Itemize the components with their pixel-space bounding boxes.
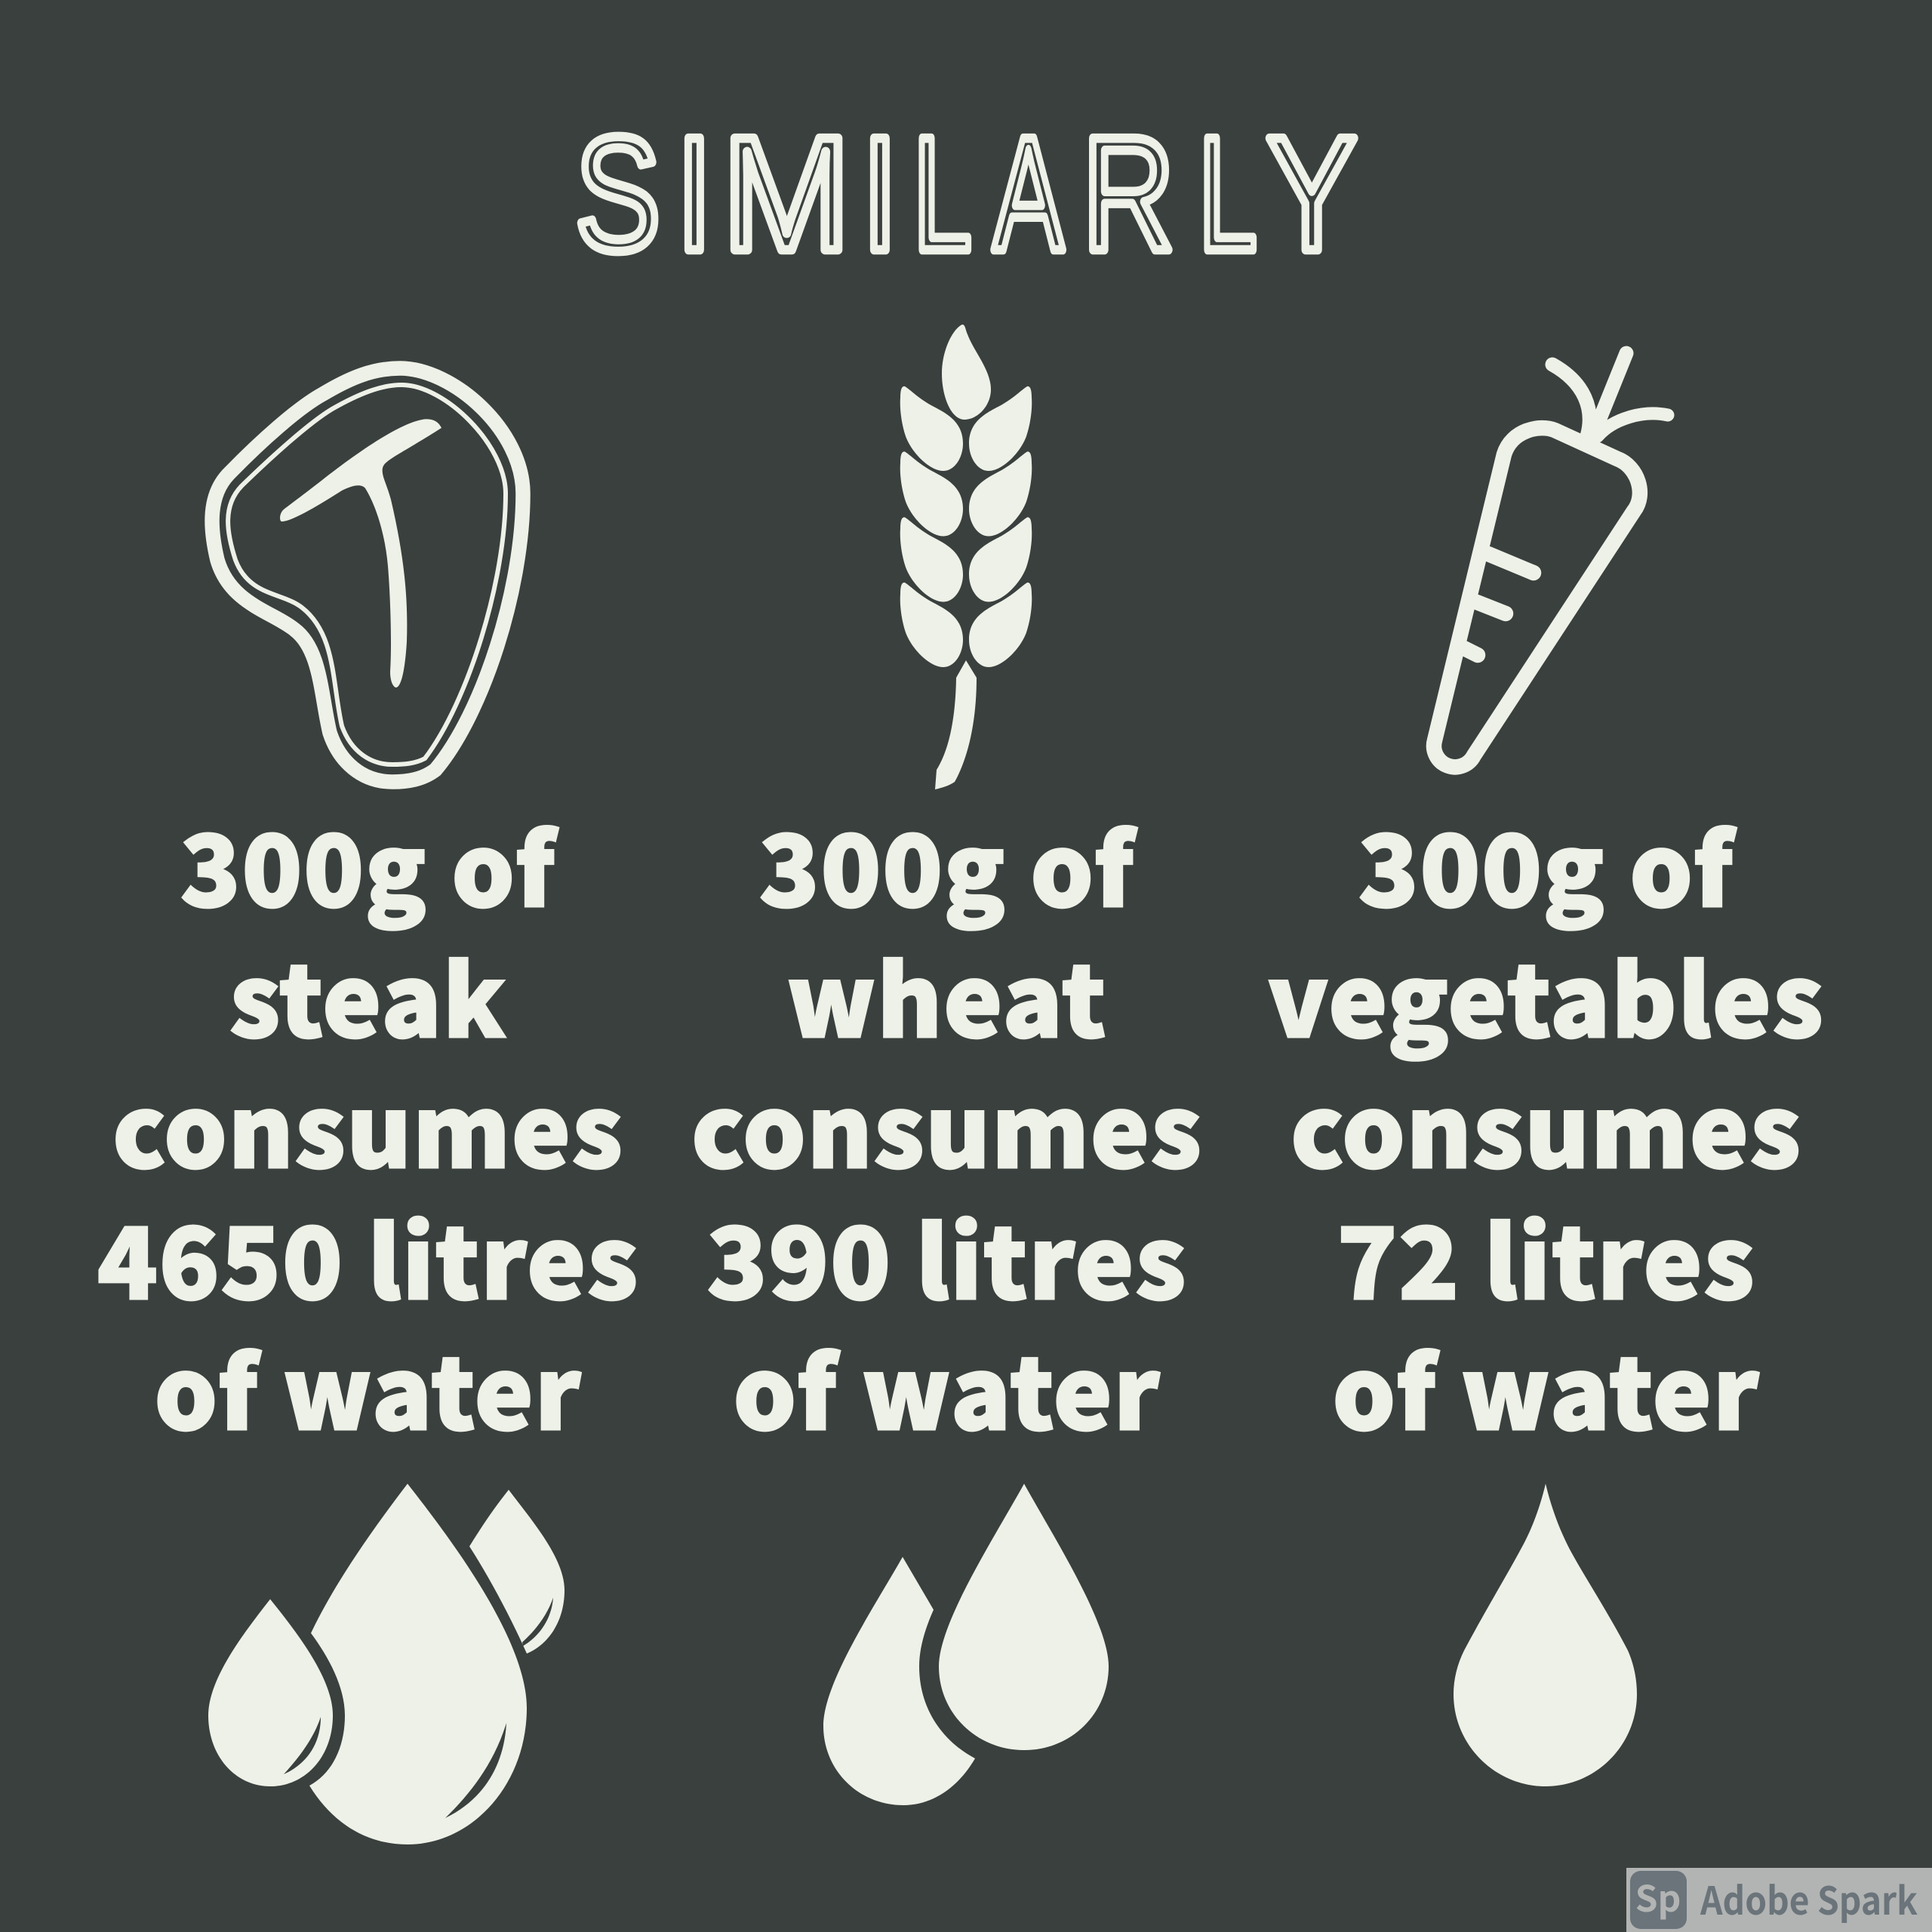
title: M bbox=[722, 103, 851, 285]
text: vegetables: 72 litres bbox=[1337, 1184, 1755, 1327]
text: wheat bbox=[691, 792, 1203, 1458]
text: steak: steak bbox=[229, 922, 507, 1066]
text: wheat: wheat bbox=[787, 922, 1107, 1066]
icon: three water drops bbox=[208, 1484, 565, 1844]
watermark: Adobe Spark bbox=[1626, 1868, 1932, 1932]
text: steak: of water bbox=[155, 1315, 582, 1458]
title: Y bbox=[1266, 103, 1357, 285]
title: R bbox=[1082, 104, 1175, 285]
text: vegetables: vegetables bbox=[1268, 922, 1825, 1066]
title: L bbox=[1198, 104, 1257, 285]
text: steak bbox=[97, 792, 639, 1458]
title: A bbox=[993, 104, 1063, 285]
text: vegetables: 300g of bbox=[1358, 792, 1737, 935]
watermark: Adobe Spark: Sp bbox=[1635, 1869, 1681, 1922]
text: vegetables: of water bbox=[1333, 1315, 1760, 1458]
title: L bbox=[913, 104, 972, 285]
icon: wheat bbox=[900, 325, 1032, 789]
title: S bbox=[575, 104, 660, 285]
text: steak: 4650 litres bbox=[97, 1184, 639, 1327]
icon: two water drops bbox=[823, 1484, 1109, 1805]
icon: steak bbox=[212, 368, 523, 782]
text: vegetables bbox=[1268, 792, 1825, 1458]
text: steak: consumes bbox=[112, 1053, 624, 1196]
text: wheat: consumes bbox=[691, 1053, 1203, 1196]
text: steak: 300g of bbox=[180, 792, 558, 935]
title bbox=[575, 103, 1357, 285]
icon: one water drop bbox=[1454, 1484, 1637, 1786]
icon: carrot bbox=[1434, 353, 1668, 767]
text: wheat: 390 litres bbox=[707, 1184, 1187, 1327]
title: I bbox=[676, 104, 712, 285]
title: I bbox=[862, 104, 898, 285]
text: wheat: 300g of bbox=[759, 792, 1137, 935]
text: vegetables: consumes bbox=[1291, 1053, 1802, 1196]
text: wheat: of water bbox=[734, 1315, 1161, 1458]
